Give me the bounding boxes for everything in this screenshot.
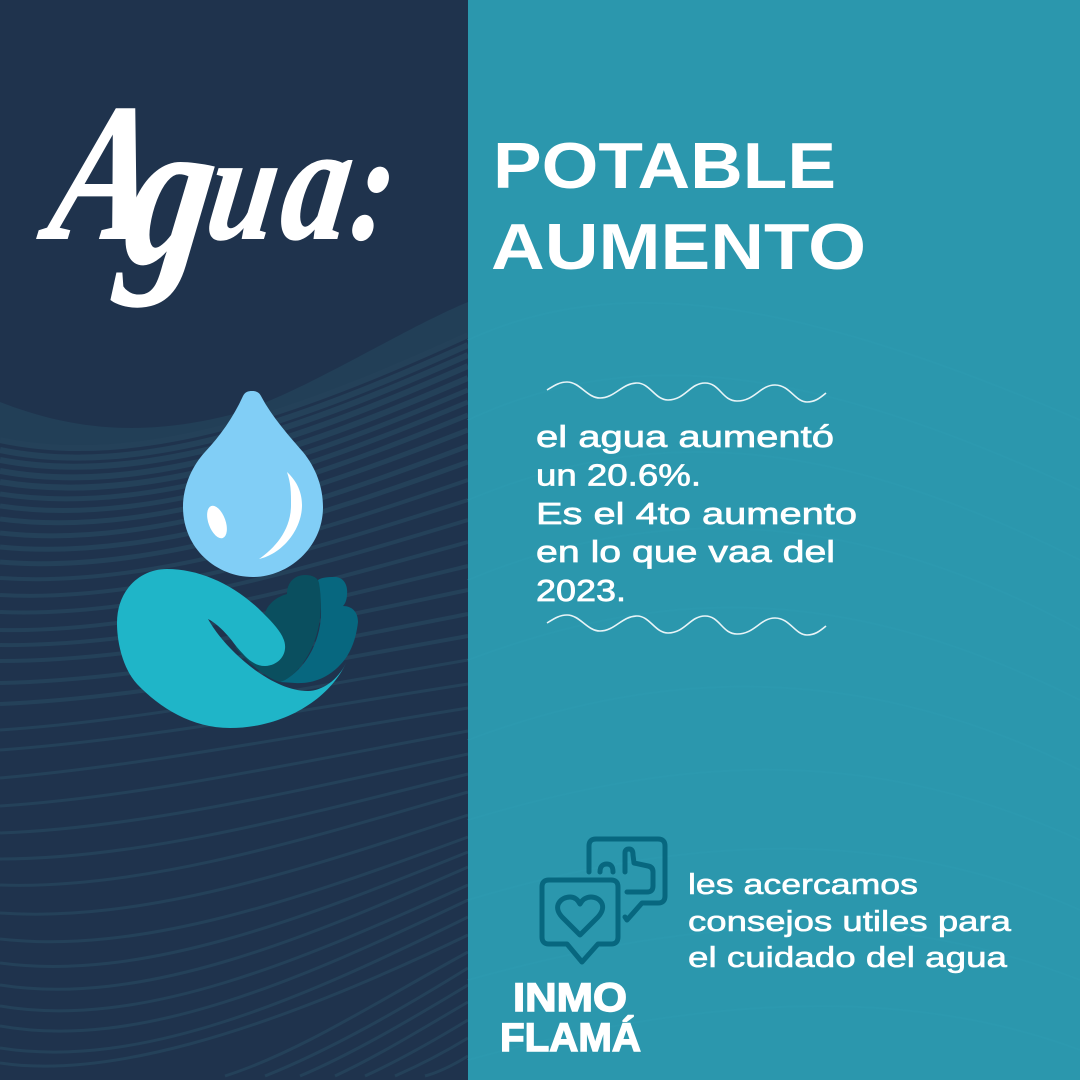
panel: right teal background <box>468 0 1080 1080</box>
text block: tips: el cuidado del agua <box>688 942 1008 974</box>
heading: POTABLE AUMENTO: POTABLE <box>493 129 836 202</box>
title: Agua: A <box>30 66 175 281</box>
text block: water increase: en lo que vaa del <box>536 534 835 569</box>
heading: POTABLE AUMENTO: AUMENTO <box>491 210 866 283</box>
text block: water increase <box>536 419 857 608</box>
title: Agua: u <box>199 104 290 271</box>
icon: water drop <box>183 391 323 577</box>
logo: INMO FLAMÁ: FLAMÁ <box>500 1015 641 1060</box>
heading: POTABLE AUMENTO <box>491 129 866 283</box>
text block: water increase: el agua aumentó <box>536 419 834 454</box>
text block: tips: consejos utiles para <box>688 906 1012 938</box>
text block: water increase: un 20.6%. <box>536 458 701 492</box>
icon: thumbs up bubble <box>589 839 665 920</box>
panel: left navy background <box>0 0 468 1080</box>
divider: bottom wavy line <box>547 615 826 635</box>
icon: heart bubble <box>542 880 618 962</box>
icon: water drop held by hand <box>117 391 358 728</box>
divider: top wavy line <box>547 382 826 402</box>
title: Agua: a <box>272 91 365 274</box>
text block: tips <box>688 869 1012 974</box>
text block: water increase: 2023. <box>536 573 626 608</box>
icon: social speech bubbles <box>542 839 665 962</box>
logo: INMO FLAMÁ: INMO <box>513 976 627 1020</box>
icon: hand <box>117 569 346 728</box>
logo: INMO FLAMÁ <box>500 976 641 1060</box>
title: Agua: g <box>110 76 232 308</box>
text block: tips: les acercamos <box>688 869 918 901</box>
text block: water increase: Es el 4to aumento <box>536 496 857 531</box>
icon: fingers <box>235 575 358 683</box>
title: Agua: : <box>343 104 408 271</box>
